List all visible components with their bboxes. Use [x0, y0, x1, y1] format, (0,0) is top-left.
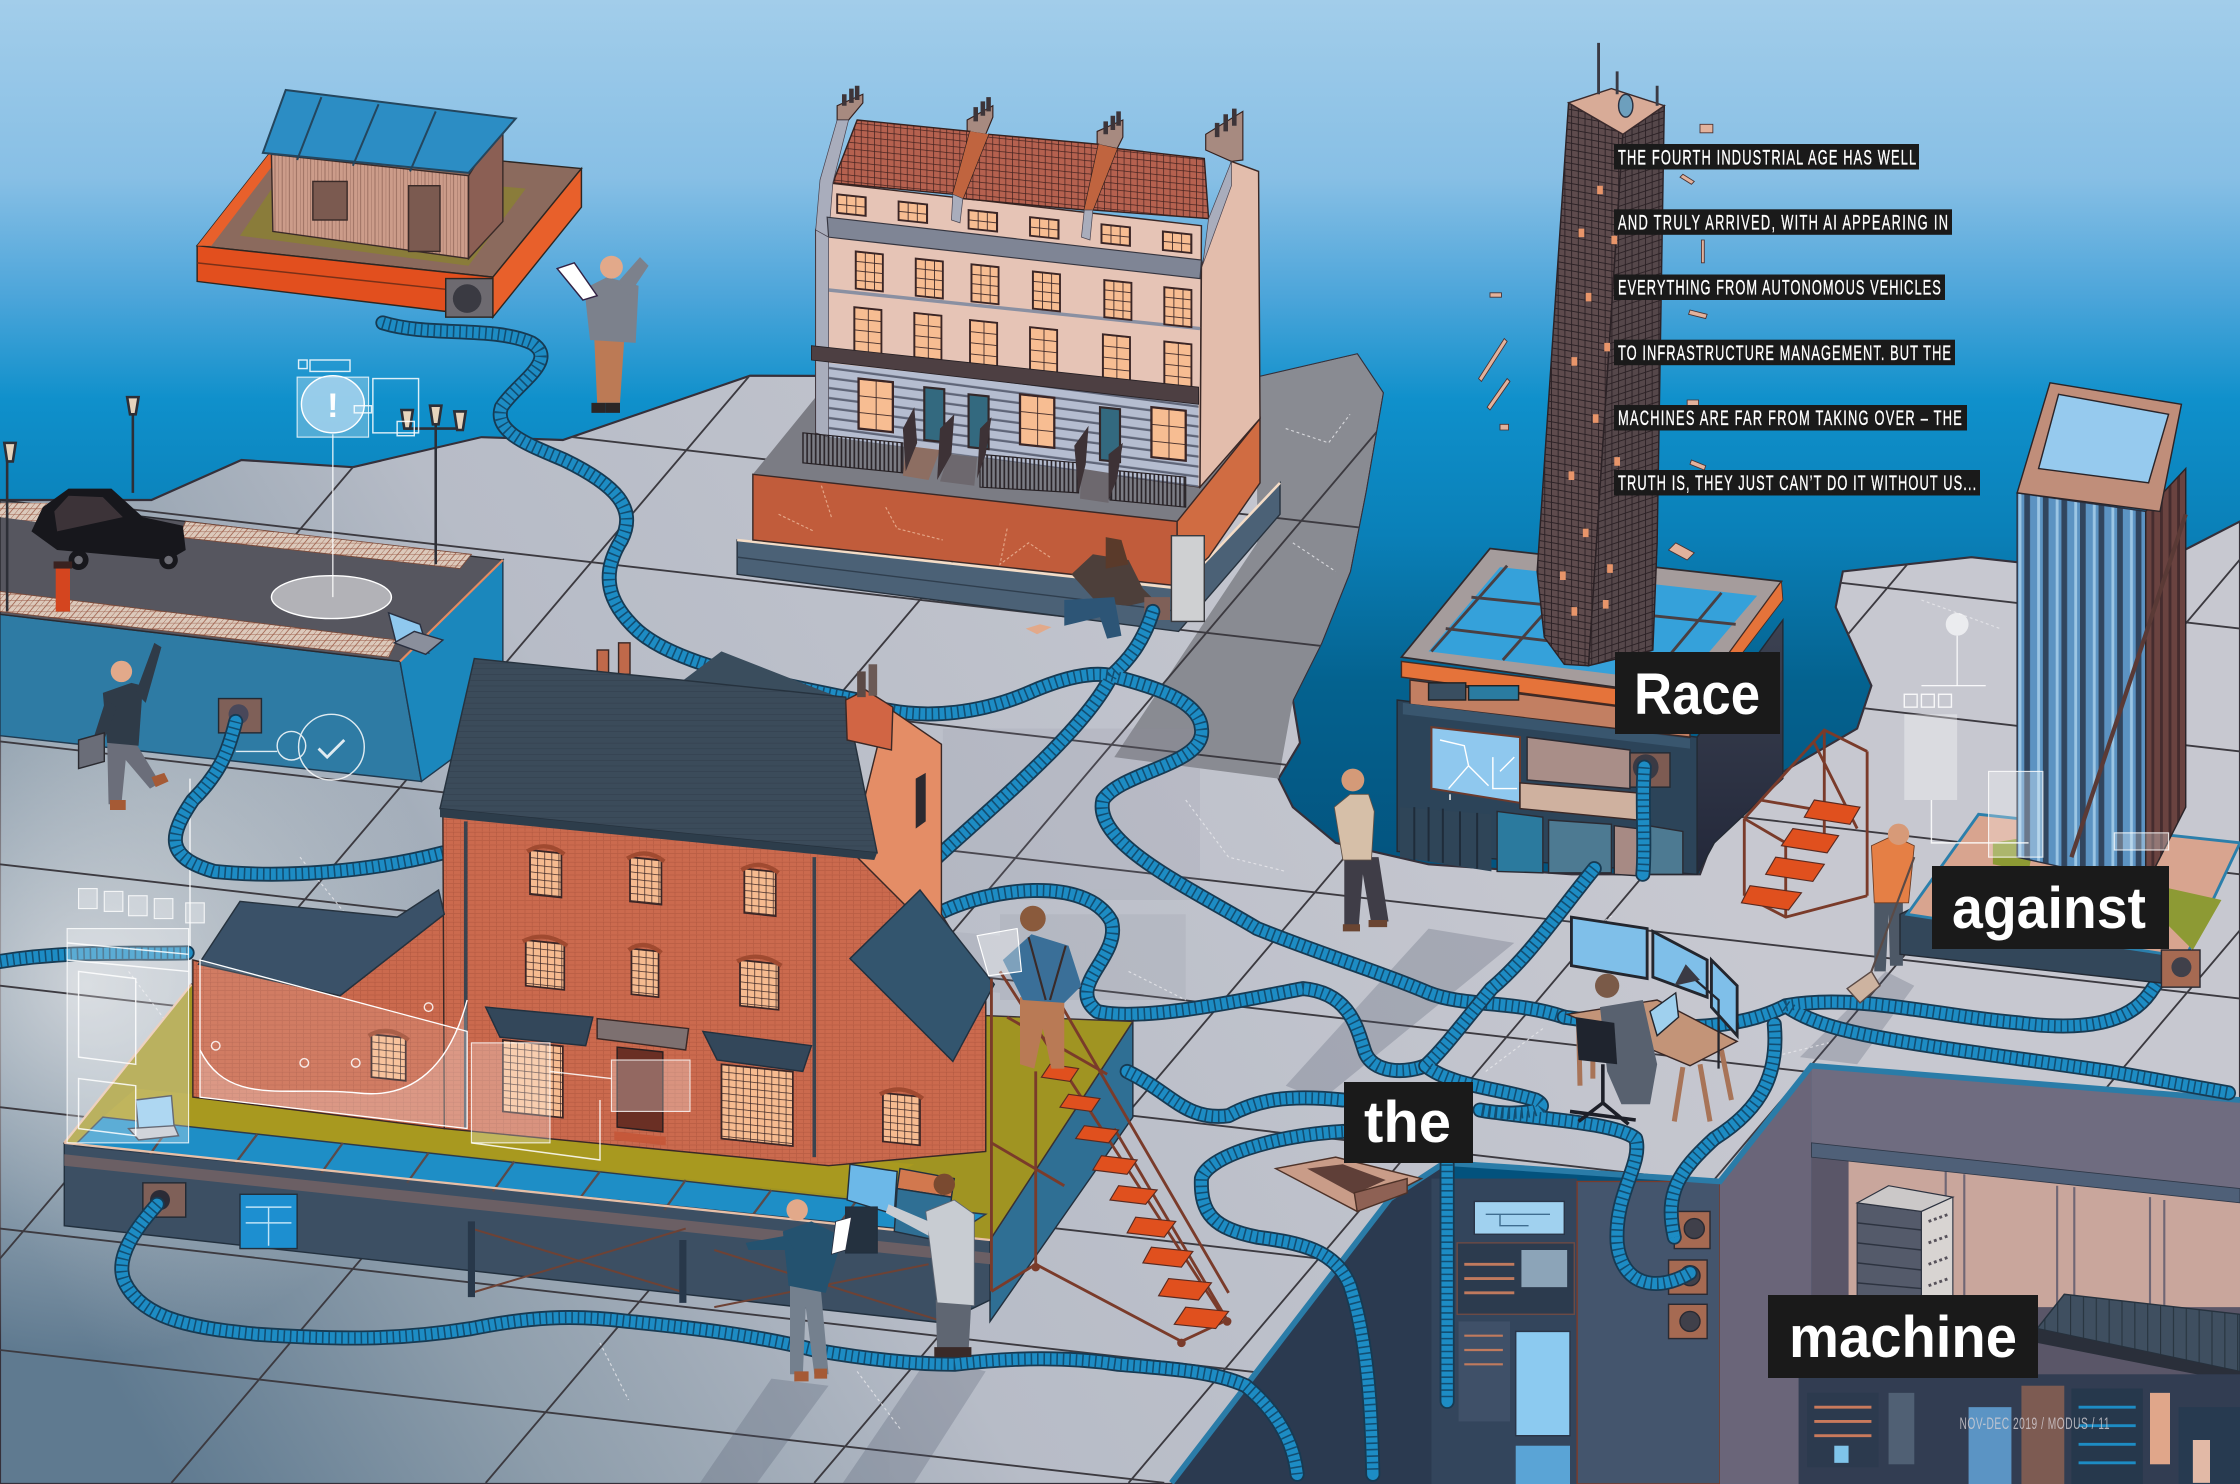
intro text block: [1614, 144, 1980, 496]
shed side: [469, 121, 503, 259]
grey panel: [1527, 737, 1630, 789]
arched lintels: [369, 846, 923, 1099]
platform top: [197, 140, 581, 277]
iron railings: [803, 433, 1186, 507]
mansard roofs: [833, 120, 1209, 219]
desk lamp: [1686, 971, 1719, 1069]
dashboard screen: [1431, 727, 1520, 803]
lower machine room: [1171, 1066, 2240, 1484]
red brick house: [67, 643, 994, 1166]
yellow lawn: [103, 1089, 914, 1197]
moss: [1993, 836, 2221, 950]
holograms: [1904, 613, 2169, 857]
man in blue: [746, 1199, 851, 1381]
wall sockets: [1669, 1211, 1710, 1339]
floor cracks: [129, 414, 2000, 1429]
hoses behind house: [0, 323, 1564, 1071]
plinth top: [753, 397, 1260, 521]
dormer windows: [837, 194, 1191, 253]
monitors: [1571, 917, 1737, 1036]
laptop: [389, 613, 443, 654]
upper plant wall band: [1811, 1066, 2240, 1194]
title word: the: [1344, 1082, 1473, 1163]
near pavement: [0, 591, 397, 657]
panel screens: [240, 1194, 297, 1249]
title word: against: [1932, 866, 2169, 949]
conveyor: [2037, 1294, 2240, 1383]
machinery bank: [1799, 1374, 2240, 1484]
diagonal brace: [2071, 514, 2186, 857]
platform front: [64, 1143, 990, 1323]
rim: [64, 984, 990, 1240]
party walls: [953, 131, 1117, 210]
lean-to roof: [850, 890, 994, 1061]
pink service band: [1410, 680, 1690, 737]
terrace building: [737, 86, 1280, 631]
check hologram: [190, 714, 364, 986]
laptop on platform: [129, 1096, 179, 1140]
floating shed platform: [197, 90, 581, 317]
podium front: [1397, 700, 1697, 874]
socket: [1630, 753, 1670, 787]
annex wall: [193, 914, 444, 1129]
solar roof: [263, 90, 516, 173]
road: [0, 500, 503, 661]
platform socket: [143, 1183, 186, 1217]
lawn: [240, 179, 526, 266]
title word: the: the: [1364, 1090, 1451, 1155]
string course: [829, 290, 1200, 329]
tall stepladder: [991, 971, 1231, 1347]
cornice: [827, 217, 1201, 279]
roof panes: [1429, 567, 1757, 683]
foreground hoses: [122, 869, 2229, 1474]
middle windows: [854, 307, 1191, 389]
hologram alert: !: [327, 387, 339, 425]
white info panels: [67, 889, 204, 1143]
title word: machine: [1768, 1295, 2038, 1378]
floor ghost reflection: [954, 728, 1200, 1000]
rack screens: [1457, 1201, 1574, 1484]
street lamps: [4, 397, 466, 611]
slab lip: [1171, 1066, 2240, 1483]
left bay: [486, 1007, 593, 1118]
chimney: [846, 664, 893, 750]
hologram alert: [271, 360, 419, 619]
main roof: [440, 659, 877, 853]
beige louvre: [1520, 783, 1637, 820]
ground floor rustication: [829, 363, 1199, 487]
orange band: [1401, 661, 1696, 716]
upper tower podium: [1397, 549, 1783, 876]
title word: machine: machine: [1789, 1305, 2017, 1370]
chimneys: [837, 94, 1243, 161]
planter wall: [1900, 907, 2186, 986]
pale pilasters: [816, 120, 1231, 264]
taxi: [31, 489, 186, 570]
braces: [471, 1229, 943, 1321]
curve chart: [200, 960, 467, 1129]
intro text block: THE FOURTH INDUSTRIAL AGE HAS WELL: [1618, 145, 1916, 169]
cardboard box: [1276, 1157, 1421, 1211]
front steps: [903, 407, 1123, 503]
dark shaft wall: [1171, 1163, 1444, 1484]
desk legs: [1579, 1021, 1731, 1121]
podium hose: [1643, 767, 1644, 874]
page footer: NOV-DEC 2019 / MODUS / 11: [1960, 1413, 2110, 1433]
skyscraper: [1479, 43, 1713, 666]
balcony rail: [811, 346, 1199, 404]
house platform: [64, 984, 1133, 1323]
top surface: [64, 984, 1133, 1240]
intro text block: MACHINES ARE FAR FROM TAKING OVER – THE: [1618, 406, 1962, 430]
man with tablet: [557, 256, 649, 413]
wall front: [0, 614, 421, 781]
porch and door: [597, 1019, 689, 1145]
right rising stepladder: [1741, 730, 1867, 917]
corner wall: [1720, 1066, 1811, 1484]
gable side wall: [850, 707, 986, 1150]
blue panels: [74, 1117, 986, 1234]
antennas: [1599, 43, 1657, 106]
glass facade: [2017, 493, 2146, 886]
right bay: [703, 1031, 811, 1146]
orange rims: [197, 246, 493, 317]
translucent boxes: [471, 1043, 690, 1160]
facade: [816, 183, 1201, 487]
man in sweater: [1334, 769, 1389, 931]
orange base side: [1177, 419, 1260, 586]
outer plinth: [737, 483, 1280, 631]
lower blue doors: [1497, 811, 1543, 873]
gable windows: [909, 773, 926, 960]
server block: [1857, 1186, 1953, 1297]
control panel wall: [1577, 1181, 1720, 1484]
roof frame: [1401, 549, 1781, 699]
debris: [1479, 124, 1713, 560]
annex roof: [199, 890, 444, 996]
post box: [54, 561, 72, 611]
man sweeping: [1847, 824, 1914, 1003]
roof chimney pots: [597, 643, 630, 676]
base cracks: [779, 486, 1050, 564]
intro text block: EVERYTHING FROM AUTONOMOUS VEHICLES: [1618, 275, 1941, 299]
man in lab coat: [886, 1174, 974, 1357]
brown fins: [2146, 469, 2186, 886]
podium side: [1697, 620, 1783, 874]
title word: Race: [1615, 652, 1780, 734]
upper windows: [856, 251, 1191, 327]
roof box: [2017, 383, 2181, 511]
title word: Race: Race: [1634, 662, 1760, 727]
room interior: [1811, 1149, 2240, 1484]
shed window and door: [313, 181, 440, 251]
desk: [1567, 1000, 1737, 1066]
control kiosk: [846, 1164, 954, 1253]
back roof: [657, 651, 846, 743]
socket: [2161, 950, 2200, 987]
socket: [219, 699, 261, 733]
man with briefcase: [79, 643, 169, 810]
house windows: [371, 850, 920, 1145]
desk worker: [1570, 974, 1657, 1124]
title word: against: against: [1952, 876, 2146, 941]
pink door: [1614, 826, 1637, 876]
pink wall panels: [1849, 1160, 2240, 1307]
far pavement: [179, 521, 471, 569]
orange base front: [753, 474, 1177, 586]
intro text block: AND TRULY ARRIVED, WITH AI APPEARING IN: [1618, 210, 1948, 234]
hologram overlays: [67, 889, 690, 1160]
ground slab: [0, 354, 2240, 1484]
fan unit: [446, 279, 493, 317]
gable side wall: [1200, 161, 1260, 487]
worker on scaffold: [977, 906, 1081, 1069]
platform side: [990, 1021, 1133, 1321]
cast shadows: [700, 929, 1914, 1483]
intro text block: TO INFRASTRUCTURE MANAGEMENT. BUT THE: [1618, 340, 1951, 365]
desk laptop: [1650, 993, 1679, 1036]
crouching woman: [1026, 536, 1204, 639]
downpipes: [466, 821, 814, 1157]
workstation: [1567, 917, 1737, 1124]
chimney pots: [844, 86, 1234, 137]
rack wall: [1431, 1179, 1577, 1484]
steel band: [1403, 703, 1690, 749]
orange rim side: [1696, 581, 1783, 703]
rail: [1811, 1143, 2240, 1203]
slab grid: [0, 354, 2240, 1484]
device strip: [1429, 683, 1519, 700]
ground windows and doors: [859, 379, 1186, 462]
intro text block: TRUTH IS, THEY JUST CAN’T DO IT WITHOUT US...: [1618, 471, 1976, 495]
street block: [0, 360, 503, 986]
planter: [1907, 814, 2240, 957]
lower slats: [1400, 807, 1491, 871]
main facade: [443, 810, 986, 1166]
shed front: [271, 154, 469, 259]
right tower base: [1900, 383, 2240, 987]
orange coping: [400, 560, 503, 661]
wall side: [400, 560, 503, 781]
orange lit windows: [1560, 186, 1649, 616]
